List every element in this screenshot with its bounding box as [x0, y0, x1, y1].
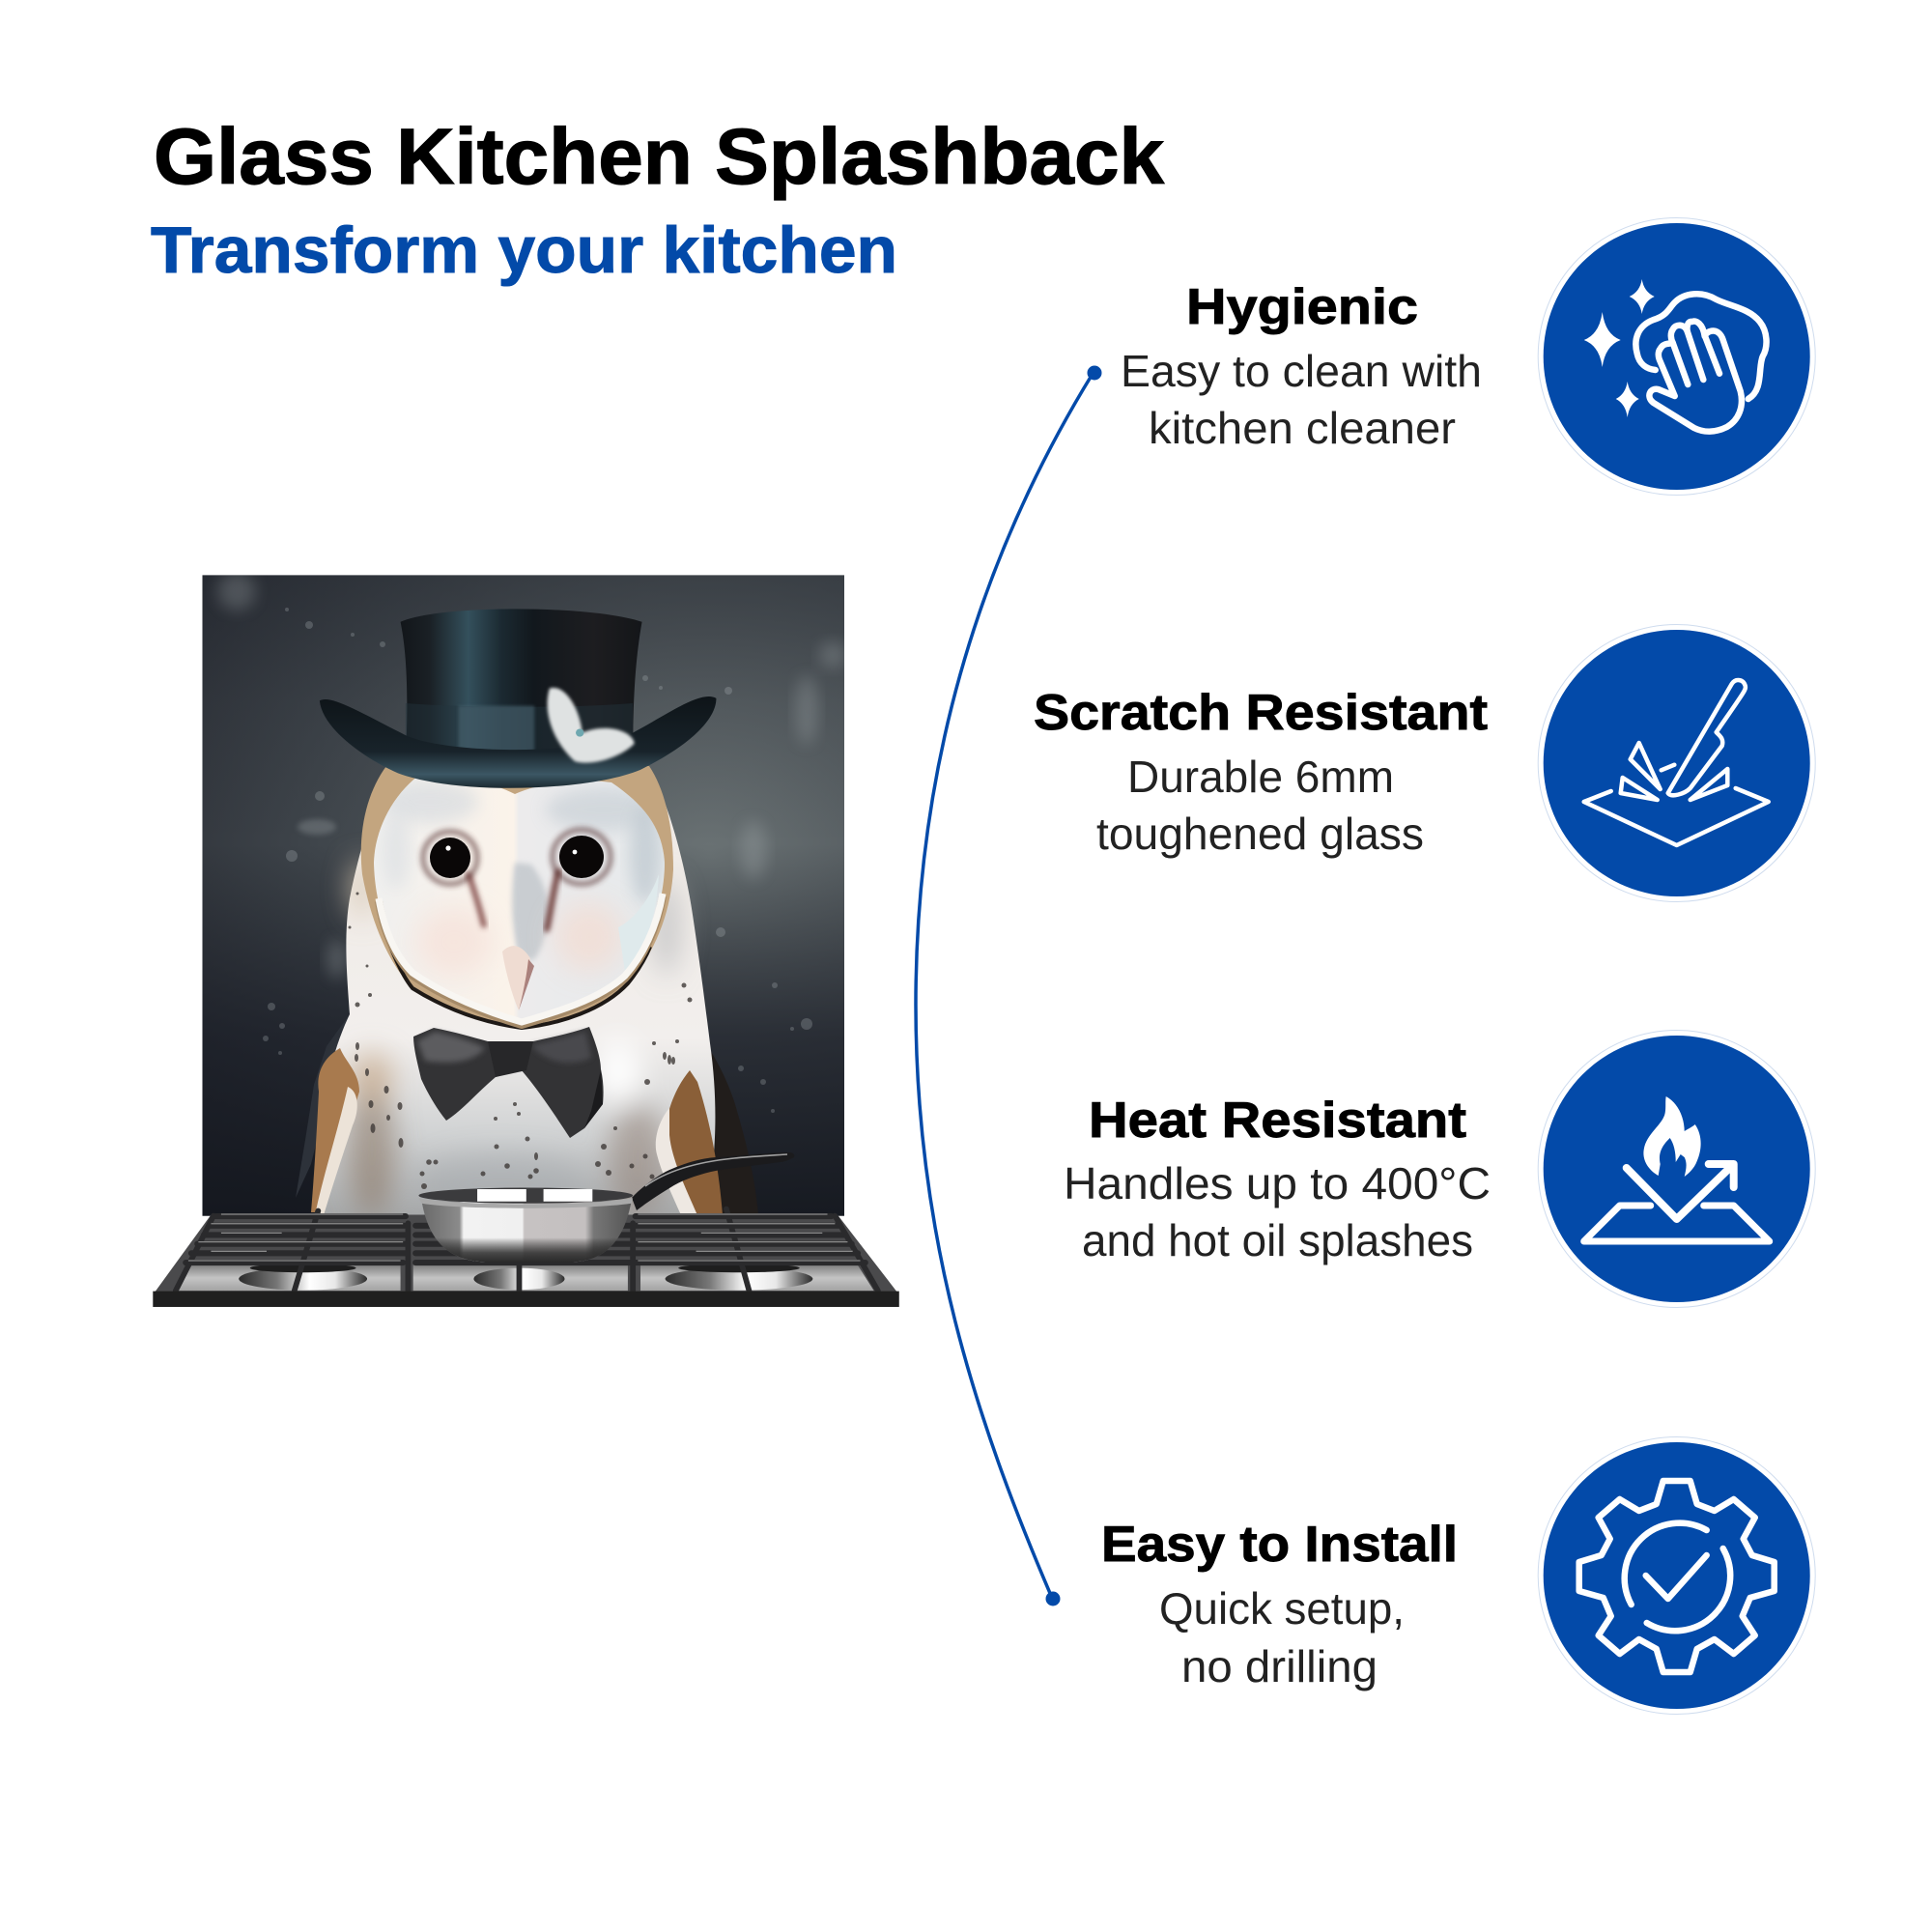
- panel: splashback with owl: [203, 572, 846, 1217]
- owl head ruff: [361, 766, 673, 1028]
- top hat: [320, 609, 716, 788]
- chest speckles: [348, 893, 692, 1189]
- owl left wing: [311, 1048, 359, 1215]
- icon: gear with check mark: [1538, 1437, 1815, 1714]
- feature: Heat Resistant: Handles up to 400°C: [1064, 1158, 1491, 1208]
- feature: Scratch Resistant: Scratch Resistant: [1034, 685, 1488, 741]
- owl right wing dark edge: [691, 1032, 758, 1215]
- subtitle: Transform your kitchen: [151, 213, 897, 287]
- owl body: [315, 773, 715, 1215]
- hob burners: [239, 1264, 812, 1291]
- bow tie: [413, 1027, 604, 1138]
- title: Glass Kitchen Splashback: [154, 113, 1164, 201]
- feature: Easy to Install: [1101, 1517, 1458, 1691]
- hob steel surface: [178, 1265, 401, 1291]
- connector curve with end dots: [916, 365, 1101, 1605]
- feature: Easy to Install: Quick setup,: [1159, 1583, 1405, 1634]
- owl feather shading: [349, 860, 680, 1217]
- feature: Hygienic: [1121, 279, 1482, 453]
- frying pan: [418, 1152, 794, 1263]
- gas hob: [153, 1208, 899, 1307]
- hob front band: [153, 1292, 899, 1307]
- owl eye markings: [423, 830, 611, 929]
- grate highlights: [188, 1214, 861, 1261]
- icon: hand wiping with sparkles: [1538, 218, 1815, 495]
- infographic canvas: [151, 126, 1816, 1715]
- hob grates: [176, 1208, 878, 1291]
- feature: Scratch Resistant: Durable 6mm: [1127, 752, 1394, 802]
- face feathered rim: [379, 896, 663, 1025]
- owl beak: [502, 946, 534, 1010]
- owl face: [374, 775, 665, 1025]
- feature: Scratch Resistant: [1034, 685, 1488, 859]
- feature: Heat Resistant: and hot oil splashes: [1082, 1215, 1473, 1265]
- owl left wing dark edge: [296, 1014, 350, 1198]
- icon: flame on heat resistant surface: [1538, 1030, 1815, 1308]
- feature: Heat Resistant: [1064, 1093, 1491, 1265]
- feature: Hygienic: kitchen cleaner: [1149, 403, 1456, 453]
- feather ornament: [548, 688, 635, 763]
- icon: knife scratching glass: [1538, 624, 1815, 902]
- pan handle: [632, 1152, 794, 1210]
- owl right wing: [656, 1070, 723, 1215]
- feature: Heat Resistant: Heat Resistant: [1089, 1093, 1466, 1149]
- feature: Easy to Install: no drilling: [1181, 1641, 1378, 1691]
- feature: Hygienic: Hygienic: [1186, 279, 1418, 335]
- feature: Scratch Resistant: toughened glass: [1096, 809, 1424, 859]
- pan bowl: [418, 1187, 633, 1263]
- feature: Hygienic: Easy to clean with: [1121, 346, 1482, 396]
- owl eyes: [430, 836, 604, 878]
- feature: Easy to Install: Easy to Install: [1101, 1517, 1458, 1573]
- product illustration: owl splashback above gas hob: [153, 572, 899, 1307]
